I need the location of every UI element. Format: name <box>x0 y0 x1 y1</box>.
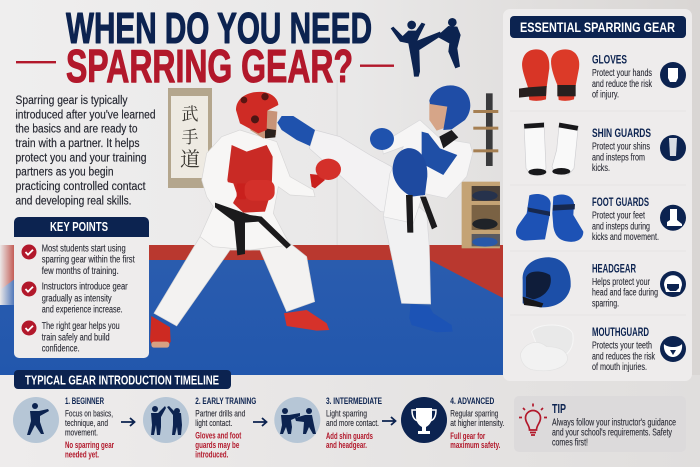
arrow 3 <box>382 417 396 425</box>
key point 2: and experience increase. <box>42 305 123 316</box>
intro text: partners as you begin <box>16 167 114 179</box>
intro text: train with a partner. It helps <box>16 138 140 150</box>
gear: gloves description: of injury. <box>592 90 619 100</box>
arrow 2 <box>253 418 266 426</box>
key point 1: sparring gear within the first <box>42 255 135 266</box>
gear: foot guards description: kicks and movement. <box>592 232 659 243</box>
key point 1 <box>42 243 135 277</box>
gear: headgear image <box>523 257 571 307</box>
key point 1: Most students start using <box>42 243 126 254</box>
title line one: WHEN DO YOU NEED <box>66 5 372 53</box>
step 4 text: maximum safety. <box>450 440 500 450</box>
intro text: and developing real skills. <box>16 195 132 207</box>
right red rule <box>360 64 394 67</box>
step 2 icon: partner drill <box>143 397 189 443</box>
red headgear <box>236 92 278 133</box>
intro text: Sparring gear is typically <box>16 95 128 107</box>
gear: mouthguard description: Protects your teeth <box>592 341 652 352</box>
fighter: blue gear <box>277 85 473 332</box>
gear: mouthguard description: and reduces the risk <box>592 351 655 362</box>
fighter: red gear <box>150 92 341 348</box>
title line two: SPARRING GEAR? <box>66 40 353 92</box>
icon: light bulb <box>519 404 547 435</box>
wall scroll: 道 <box>180 143 200 172</box>
icon: kicking silhouettes <box>391 18 461 77</box>
wall shelves <box>337 80 500 248</box>
key point 3: The right gear helps you <box>42 321 120 332</box>
panel: tip <box>514 396 686 452</box>
key points header: KEY POINTS <box>50 220 108 234</box>
step 4 text: at higher intensity. <box>450 417 504 428</box>
intro text: the basics and are ready to <box>16 124 138 136</box>
blue fighter foot guard <box>277 116 315 146</box>
blue fighter collar <box>439 130 458 148</box>
intro text <box>16 95 156 207</box>
check icon 3 <box>22 320 36 336</box>
step 2 text: Partner drills and <box>195 408 245 419</box>
step 3 text: and more contact. <box>326 417 379 428</box>
icon: shin guard <box>660 135 686 161</box>
blue fighter kicking leg <box>309 130 403 213</box>
step 2 text: guards may be <box>195 440 239 450</box>
step 4 text: Regular sparring <box>450 408 498 419</box>
gear: foot guards description: Protect your feet <box>592 211 645 222</box>
wall scroll <box>168 88 212 188</box>
bottom band <box>0 375 700 467</box>
red back foot pad <box>150 316 171 347</box>
gear: shin guards description: Protect your shins <box>592 142 650 153</box>
gear: mouthguard title: MOUTHGUARD <box>592 327 649 339</box>
step 2 text <box>195 396 256 459</box>
icon: foot guard <box>660 205 686 231</box>
background: red floor <box>0 245 503 375</box>
blue fighter face <box>429 103 448 131</box>
gear: foot guards title: FOOT GUARDS <box>592 197 649 209</box>
icon: glove <box>660 62 686 88</box>
gear: gloves title: GLOVES <box>592 55 627 67</box>
key point 2: gradually as intensity <box>42 293 112 304</box>
arrow 1 <box>121 418 134 426</box>
gear: mouthguard description <box>592 341 655 373</box>
step 3 text: Light sparring <box>326 408 367 419</box>
gear: shin guards title: SHIN GUARDS <box>592 128 651 140</box>
background: left edge fade <box>0 245 16 305</box>
key point 3: confidence. <box>42 344 80 355</box>
left red rule <box>16 61 56 63</box>
key point 3: train safely and build <box>42 332 110 343</box>
gear: shin guards image <box>524 123 578 175</box>
timeline heading <box>14 370 231 389</box>
gear: shin guards description: and insteps from <box>592 152 645 163</box>
intro text: practicing controlled contact <box>16 181 146 193</box>
red punch glove <box>310 159 341 188</box>
key point 1: few months of training. <box>42 266 119 277</box>
step 1 icon: stance figure <box>13 397 59 443</box>
tip text <box>552 417 676 449</box>
step 3 icon: light sparring <box>274 397 320 443</box>
gear: headgear title: HEADGEAR <box>592 263 636 275</box>
red chest protector <box>227 145 273 213</box>
step 1 text: needed yet. <box>65 449 99 459</box>
step 3 text: and headgear. <box>326 440 367 450</box>
tip heading: TIP <box>552 401 566 416</box>
intro text: protect you and your training <box>16 152 146 164</box>
blue guard glove <box>393 148 427 197</box>
gear: foot guards description: and insteps during <box>592 221 650 232</box>
gear: gloves description: and reduce the risk <box>592 79 652 90</box>
gear: shin guards description <box>592 142 650 174</box>
gear: mouthguard image <box>521 325 573 371</box>
blue fighter jacket <box>382 120 473 223</box>
blue headgear <box>429 85 470 130</box>
red fighter sleeve <box>203 177 237 208</box>
back foot toes <box>151 342 169 348</box>
step 2 text: 2. EARLY TRAINING <box>195 396 256 407</box>
gear: gloves description <box>592 68 652 100</box>
step 4 text <box>450 396 504 450</box>
red fighter jacket <box>200 130 315 250</box>
step 4 text: Full gear for <box>450 431 486 441</box>
step 3 text: 3. INTERMEDIATE <box>326 396 382 407</box>
face <box>250 110 277 138</box>
gear: foot guards description <box>592 211 659 243</box>
step 1 text: 1. BEGINNER <box>65 396 104 407</box>
step 1 text: movement. <box>65 427 98 438</box>
wall scroll: 武 <box>182 100 198 125</box>
red fighter trousers <box>154 237 315 326</box>
gear: mouthguard description: of mouth injuries. <box>592 362 647 373</box>
gear: headgear description: Helps protect your <box>592 277 651 288</box>
key points header <box>14 217 149 237</box>
background: blue mat <box>0 260 503 375</box>
step 3 text <box>326 396 382 450</box>
beard <box>265 128 276 138</box>
gear: headgear description <box>592 277 658 309</box>
panel: key points <box>14 217 149 358</box>
step 1 text <box>65 396 114 459</box>
check icon 1 <box>22 244 36 260</box>
wall scroll: 手 <box>182 123 198 148</box>
gear: foot guards image <box>516 194 583 242</box>
panel: essential sparring gear <box>503 9 692 381</box>
intro text: introduced after you've learned <box>16 110 156 122</box>
blue chest protector <box>422 132 457 175</box>
check icon 2 <box>22 282 36 296</box>
gear: headgear description: head and face during <box>592 288 658 299</box>
gear: gloves image <box>519 49 579 101</box>
key point 2 <box>42 282 128 316</box>
blue stand foot guard <box>409 304 453 332</box>
tip text: comes first! <box>552 438 588 449</box>
timeline heading: TYPICAL GEAR INTRODUCTION TIMELINE <box>25 372 219 387</box>
gear: shin guards description: kicks. <box>592 163 610 174</box>
key point 3 <box>42 321 120 355</box>
step 1 text: No sparring gear <box>65 440 114 450</box>
red guard glove <box>237 180 275 201</box>
step 3 text: Add shin guards <box>326 431 373 441</box>
blue fighter standing leg <box>383 193 431 304</box>
blue fighter belt <box>406 195 437 233</box>
gear: gloves description: Protect your hands <box>592 68 652 79</box>
icon: helmet <box>660 271 686 297</box>
step 4 text: 4. ADVANCED <box>450 396 494 407</box>
icon: mouthguard <box>660 336 686 362</box>
step 2 text: Gloves and foot <box>195 431 241 441</box>
title <box>66 5 372 92</box>
black belt <box>215 203 291 255</box>
step 1 text: Focus on basics, <box>65 408 113 419</box>
blue lead glove <box>370 128 394 150</box>
gear panel header <box>510 16 686 38</box>
key point 2: Instructors introduce gear <box>42 282 128 293</box>
step 4 icon: trophy <box>401 397 447 443</box>
red front foot pad <box>284 310 329 331</box>
step 2 text: light contact. <box>195 417 232 428</box>
step 1 text: technique, and <box>65 417 108 428</box>
gear: headgear description: sparring. <box>592 298 619 309</box>
step 2 text: introduced. <box>195 449 228 459</box>
